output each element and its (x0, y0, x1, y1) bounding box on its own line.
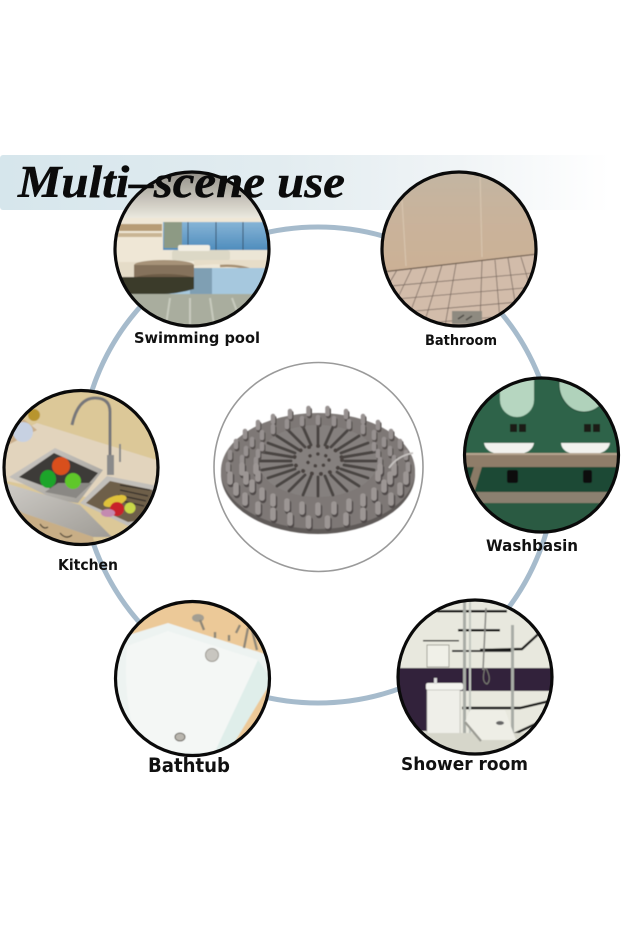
scene: bathtub (112, 598, 272, 758)
title: Multi–scene use (17, 157, 345, 207)
strainer spikes, top half (228, 408, 409, 528)
icon: grey silicone drain strainer (221, 408, 415, 534)
connecting ring (80, 227, 556, 703)
strainer spikes, bottom half (230, 465, 407, 528)
label: washbasin: Washbasin (486, 536, 578, 555)
scene: shower room (395, 597, 555, 757)
scene: bathroom floor (380, 170, 541, 330)
label: kitchen: Kitchen (58, 556, 118, 574)
label: bathroom: Bathroom (425, 333, 497, 349)
scene: swimming pool (112, 170, 272, 328)
title band (0, 155, 610, 210)
label: swimming pool: Swimming pool (134, 329, 260, 347)
scene: kitchen sink (0, 388, 162, 548)
label: bathtub: Bathtub (148, 754, 230, 777)
center product circle (214, 362, 423, 572)
scene: washbasin (462, 376, 620, 534)
label: shower room: Shower room (401, 754, 528, 775)
infographic canvas (0, 155, 620, 772)
